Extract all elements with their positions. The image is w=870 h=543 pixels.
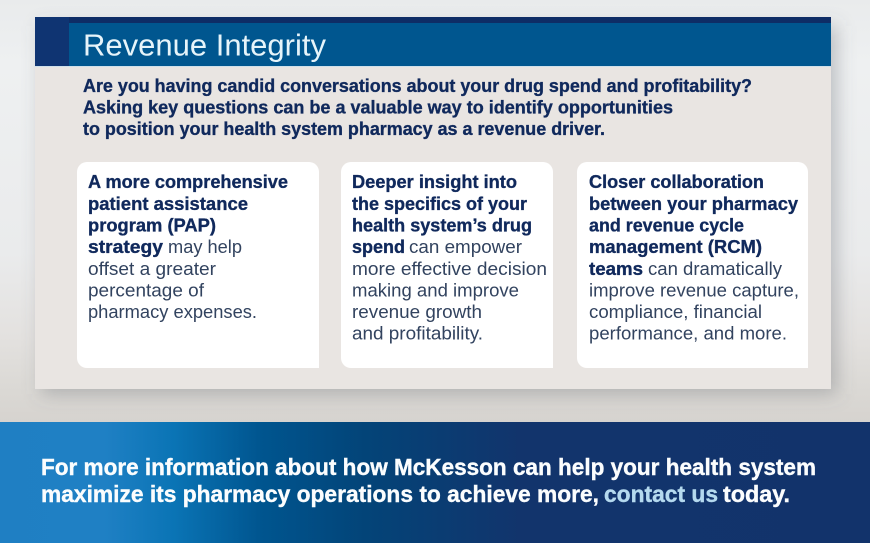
intro text: Are you having candid conversations about your drug spend and profitability?: [83, 75, 752, 96]
call to action: maximize its pharmacy operations to achieve more,: [41, 481, 599, 507]
card: patient assistance program: offset a greater: [88, 258, 216, 279]
panel shadow: [41, 26, 837, 394]
card: pharmacy and RCM collaboration: performance, and more.: [589, 322, 787, 344]
contact link: contact us: [604, 481, 718, 507]
card: drug spend insight: and profitability.: [352, 322, 483, 344]
card: drug spend insight: Deeper insight into: [352, 171, 517, 192]
card: pharmacy and RCM collaboration: can dramatically: [648, 258, 783, 279]
card: pharmacy and RCM collaboration: compliance, financial: [589, 301, 762, 322]
card: patient assistance program: [77, 162, 319, 368]
call to action: today.: [723, 481, 790, 507]
card: patient assistance program: may help: [168, 236, 242, 257]
card: drug spend insight: can empower: [409, 236, 522, 257]
intro text: to position your health system pharmacy as a revenue driver.: [83, 118, 605, 139]
card: pharmacy and RCM collaboration: [577, 162, 808, 368]
card: patient assistance program: patient assistance: [88, 193, 248, 214]
card: drug spend insight: spend: [352, 236, 405, 257]
title: Revenue Integrity: [83, 28, 326, 62]
intro text: Asking key questions can be a valuable way to identify opportunities: [83, 96, 673, 118]
call to action: [41, 454, 816, 507]
card: pharmacy and RCM collaboration: improve revenue capture,: [589, 280, 799, 300]
card: patient assistance program: strategy: [88, 236, 164, 257]
footer banner: [0, 422, 870, 543]
background: [0, 0, 870, 422]
card: patient assistance program: A more comprehensive: [88, 171, 288, 192]
card: pharmacy and RCM collaboration: teams: [589, 258, 643, 279]
card: pharmacy and RCM collaboration: management (RCM): [589, 236, 762, 257]
card: drug spend insight: making and improve: [352, 280, 519, 300]
card: pharmacy and RCM collaboration: and revenue cycle: [589, 214, 744, 236]
card: drug spend insight: health system’s drug: [352, 214, 532, 236]
card: drug spend insight: [341, 162, 553, 368]
card: drug spend insight: the specifics of your: [352, 193, 527, 214]
intro text: [83, 75, 752, 139]
card: patient assistance program: program (PAP): [88, 214, 216, 236]
card: patient assistance program: percentage of: [88, 280, 205, 300]
card: drug spend insight: revenue growth: [352, 301, 482, 322]
card: drug spend insight: more effective decision: [352, 258, 547, 279]
panel: revenue integrity: [35, 17, 831, 389]
card: pharmacy and RCM collaboration: between your pharmacy: [589, 193, 799, 214]
card: patient assistance program: pharmacy expenses.: [88, 301, 257, 322]
card: pharmacy and RCM collaboration: Closer collaboration: [589, 171, 764, 192]
header bar: [35, 17, 831, 67]
call to action: For more information about how McKesson can help your health system: [41, 454, 816, 480]
